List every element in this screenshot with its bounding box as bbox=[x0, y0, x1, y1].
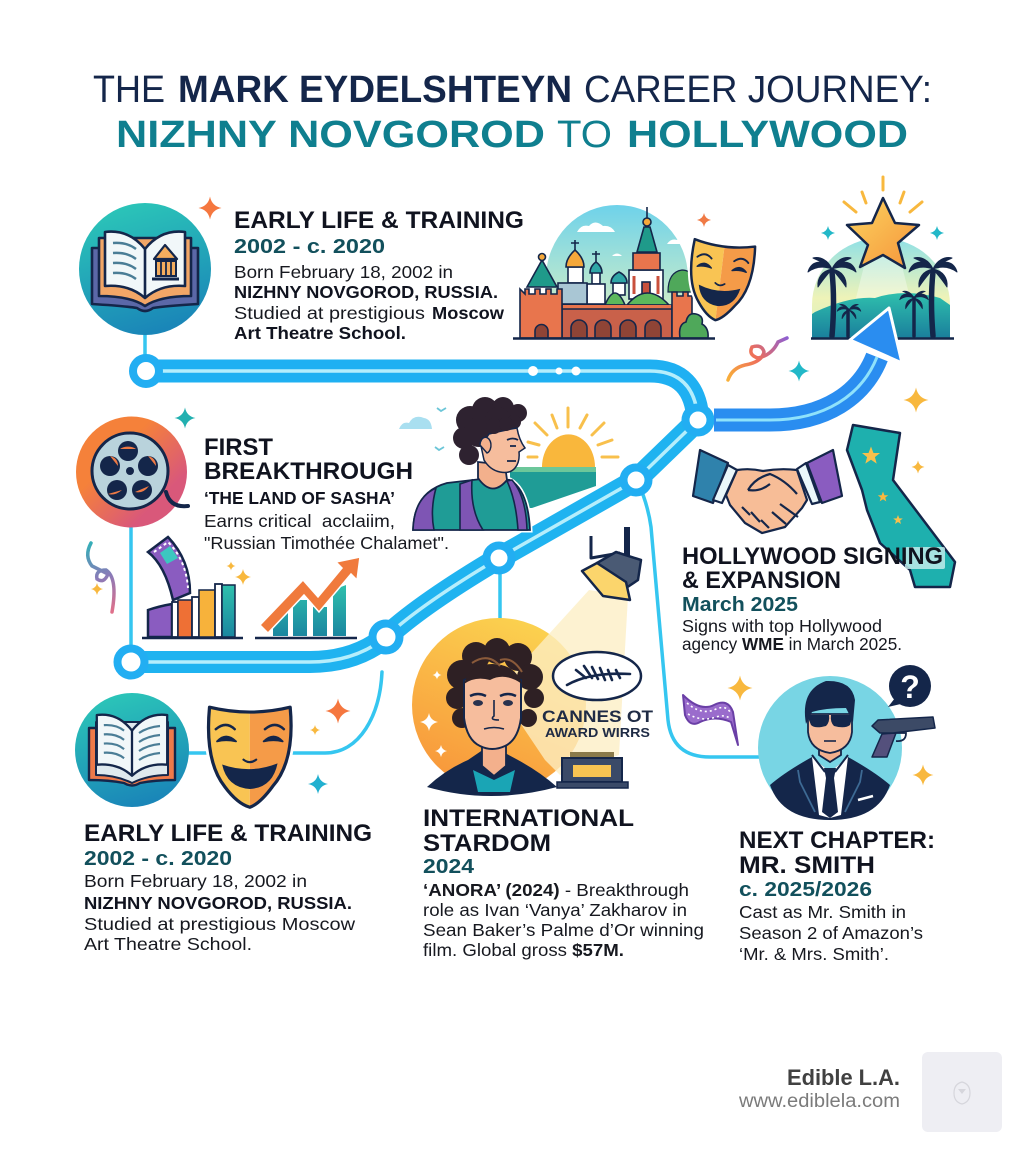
sparkle bbox=[174, 408, 196, 428]
title: MARK EYDELSHTEYN bbox=[178, 69, 572, 111]
label: cannes text: CANNES OT bbox=[542, 707, 654, 726]
heading: international stardom: Sean Baker’s Palme d’Or winning bbox=[423, 920, 704, 940]
bell tower bbox=[629, 207, 663, 299]
icon: trophy base bbox=[557, 752, 628, 788]
heading: next chapter: Season 2 of Amazon’s bbox=[739, 923, 923, 943]
decoration: ribbon left bbox=[88, 543, 114, 612]
heading: international stardom: INTERNATIONAL bbox=[423, 805, 634, 832]
illustration: star and palms bbox=[808, 177, 957, 338]
heading: first breakthrough: ‘THE LAND OF SASHA’ bbox=[204, 488, 395, 508]
icon: book circle lower bbox=[75, 693, 189, 807]
heading: next chapter: c. 2025/2026 bbox=[739, 879, 872, 901]
icon: theatre mask lower bbox=[209, 707, 291, 807]
heading: hollywood signing: Signs with top Hollywood bbox=[682, 616, 882, 636]
title: CAREER JOURNEY: bbox=[584, 69, 932, 111]
illustration: young man and sunset bbox=[399, 397, 618, 530]
heading: hollywood signing: HOLLYWOOD SIGNING bbox=[682, 543, 943, 570]
icon: book circle bbox=[79, 203, 211, 335]
heading: first breakthrough: BREAKTHROUGH bbox=[204, 458, 413, 485]
heading: first breakthrough: "Russian Timothée Chalamet". bbox=[204, 533, 449, 553]
label: cannes text bbox=[542, 707, 654, 740]
icon: theatre mask top bbox=[685, 239, 756, 324]
heading: next chapter: NEXT CHAPTER: bbox=[739, 827, 935, 854]
heading: international stardom: role as Ivan ‘Vanya’ Zakharov in bbox=[423, 900, 687, 920]
heading: early life and training, top: Studied at prestigious bbox=[234, 303, 425, 323]
label: cannes text: AWARD WIRRS bbox=[545, 725, 650, 740]
icon: question bubble bbox=[888, 665, 931, 707]
thin connector lines bbox=[131, 330, 764, 757]
heading: early life lower: Art Theatre School. bbox=[84, 934, 252, 954]
heading: early life and training, top: Moscow bbox=[432, 303, 504, 323]
heading: hollywood signing: agency WME in March 2025. bbox=[682, 634, 902, 654]
arrow to Hollywood bbox=[714, 308, 902, 420]
heading: early life lower: EARLY LIFE & TRAINING bbox=[84, 820, 372, 847]
cathedral domes bbox=[558, 240, 627, 304]
illustration: handshake bbox=[693, 450, 842, 533]
icon: spotlight bbox=[582, 527, 641, 600]
footer logo tile bbox=[922, 1052, 1002, 1132]
heading: hollywood signing bbox=[682, 543, 943, 654]
illustration: agent portrait bbox=[758, 676, 902, 820]
sparkle bbox=[697, 213, 711, 227]
heading: international stardom: ‘ANORA’ (2024) - Breakthrough bbox=[423, 880, 689, 900]
illustration: california bbox=[847, 425, 955, 587]
kremlin walls bbox=[520, 254, 708, 338]
title bbox=[93, 69, 932, 156]
sparkle bbox=[728, 676, 752, 700]
heading: first breakthrough bbox=[204, 434, 449, 553]
heading: early life and training, top: Born February 18, 2002 in bbox=[234, 262, 453, 282]
heading: early life lower: Born February 18, 2002 in bbox=[84, 871, 307, 891]
heading: international stardom: 2024 bbox=[423, 856, 475, 878]
heading: early life lower: Studied at prestigious Moscow bbox=[84, 914, 355, 934]
title: NIZHNY NOVGOROD bbox=[116, 114, 545, 156]
icon: film flag bbox=[683, 695, 738, 745]
icon: film reel circle bbox=[76, 416, 188, 528]
decoration: ribbon and sparkles right bbox=[728, 338, 928, 412]
illustration: kremlin bbox=[513, 205, 715, 338]
title: HOLLYWOOD bbox=[627, 114, 908, 156]
heading: hollywood signing: & EXPANSION bbox=[682, 567, 841, 594]
heading: next chapter: ‘Mr. & Mrs. Smith’. bbox=[739, 944, 889, 964]
heading: international stardom: film. Global gross $57M. bbox=[423, 940, 624, 960]
illustration: actor portrait bbox=[412, 590, 628, 796]
footer brand text bbox=[738, 1065, 900, 1112]
journey nodes bbox=[118, 358, 710, 676]
heading: hollywood signing: March 2025 bbox=[682, 594, 798, 616]
heading: early life and training, top bbox=[234, 207, 524, 343]
heading: first breakthrough: Earns critical acclaiim, bbox=[204, 511, 395, 531]
heading: early life lower bbox=[84, 820, 372, 954]
heading: first breakthrough: FIRST bbox=[204, 434, 273, 461]
title: TO bbox=[557, 114, 612, 156]
heading: early life and training, top: Art Theatre School. bbox=[234, 323, 406, 343]
illustration: growth chart bbox=[255, 557, 360, 638]
heading: early life and training, top: EARLY LIFE & TRAINING bbox=[234, 207, 524, 234]
heading: next chapter bbox=[739, 827, 935, 964]
sparkles lower left bbox=[308, 698, 350, 794]
heading: early life lower: 2002 - c. 2020 bbox=[84, 848, 232, 870]
sparkle bbox=[912, 764, 934, 786]
heading: early life and training, top: NIZHNY NOVGOROD, RUSSIA. bbox=[234, 282, 498, 302]
journey path: lower track bbox=[131, 420, 698, 662]
footer brand text: Edible L.A. bbox=[787, 1065, 900, 1090]
heading: early life and training, top: 2002 - c. 2020 bbox=[234, 236, 385, 258]
sparkle bbox=[198, 196, 222, 220]
footer brand text: www.ediblela.com bbox=[738, 1091, 900, 1112]
icon: cannes palm emblem bbox=[553, 652, 641, 700]
title: THE bbox=[93, 69, 165, 111]
heading: next chapter: Cast as Mr. Smith in bbox=[739, 902, 906, 922]
heading: international stardom bbox=[423, 805, 704, 960]
icon: question bubble: ? bbox=[900, 669, 920, 705]
heading: international stardom: STARDOM bbox=[423, 830, 551, 857]
illustration: film strip and bars bbox=[142, 537, 251, 638]
heading: next chapter: MR. SMITH bbox=[739, 852, 875, 879]
icon: pistol bbox=[872, 717, 935, 757]
heading: early life lower: NIZHNY NOVGOROD, RUSSIA. bbox=[84, 893, 352, 913]
journey path: upper track bbox=[146, 366, 698, 420]
